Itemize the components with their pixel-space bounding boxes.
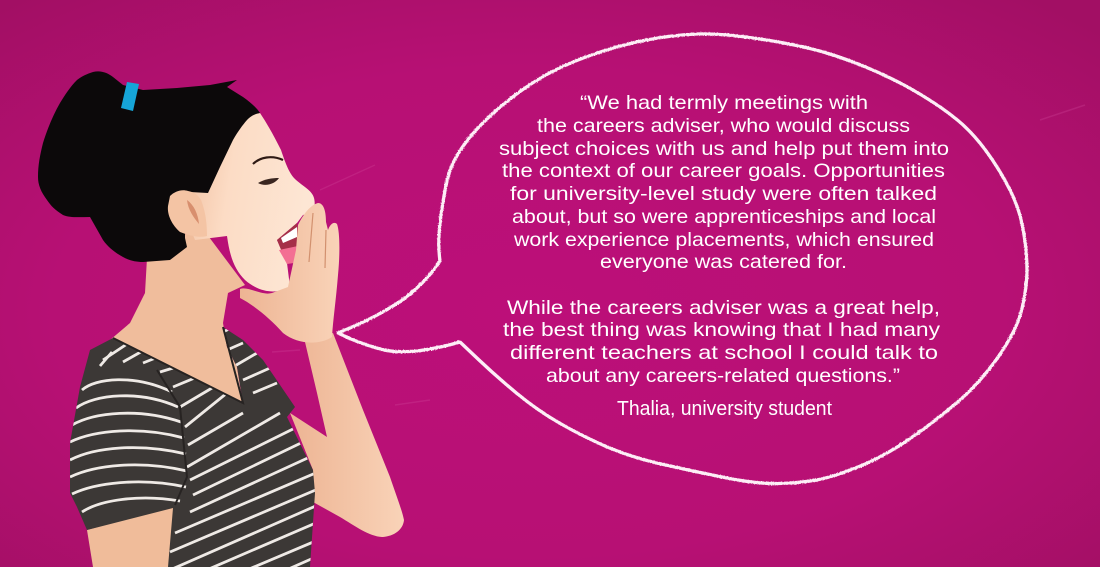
collar and sleeve seam — [113, 327, 243, 505]
striped t-shirt — [70, 327, 318, 567]
woman shouting — [38, 71, 404, 567]
shirt stripes — [70, 327, 318, 567]
hair — [38, 71, 260, 262]
inner ear — [187, 200, 199, 224]
hair band — [121, 82, 139, 111]
mouth — [277, 223, 301, 264]
quote paragraph 1 — [499, 92, 949, 273]
neck and chest — [110, 225, 245, 405]
quote paragraph 1: the context of our career goals. Opportunities — [502, 160, 945, 182]
quote paragraph 1: subject choices with us and help put them into — [499, 138, 949, 160]
tongue — [279, 246, 301, 264]
eyebrow — [253, 157, 283, 164]
finger lines — [309, 213, 326, 268]
attribution: Thalia, university student — [617, 398, 832, 420]
speech bubble outline — [338, 34, 1027, 484]
quote paragraph 1: about, but so were apprenticeships and local — [512, 206, 936, 228]
quote paragraph 2: While the careers adviser was a great help, — [507, 297, 940, 319]
quote paragraph 2 — [503, 297, 940, 387]
quote paragraph 1: for university-level study were often talked — [510, 183, 937, 205]
quote paragraph 1: “We had termly meetings with — [580, 92, 868, 114]
eye — [258, 178, 279, 185]
quote text — [499, 92, 949, 387]
chalk smudges on board — [272, 105, 1085, 405]
raised hand — [240, 203, 339, 343]
sleeve-side arm — [87, 505, 175, 567]
teeth — [281, 227, 297, 243]
quote paragraph 1: work experience placements, which ensured — [513, 229, 934, 251]
far forearm and upper arm — [290, 333, 404, 537]
quote paragraph 1: everyone was catered for. — [600, 251, 847, 273]
quote paragraph 1: the careers adviser, who would discuss — [537, 115, 910, 137]
quote paragraph 2: about any careers-related questions.” — [546, 365, 900, 387]
quote paragraph 2: the best thing was knowing that I had many — [503, 319, 940, 341]
quote paragraph 2: different teachers at school I could talk to — [510, 342, 938, 364]
ear — [168, 190, 207, 237]
face — [175, 113, 315, 291]
